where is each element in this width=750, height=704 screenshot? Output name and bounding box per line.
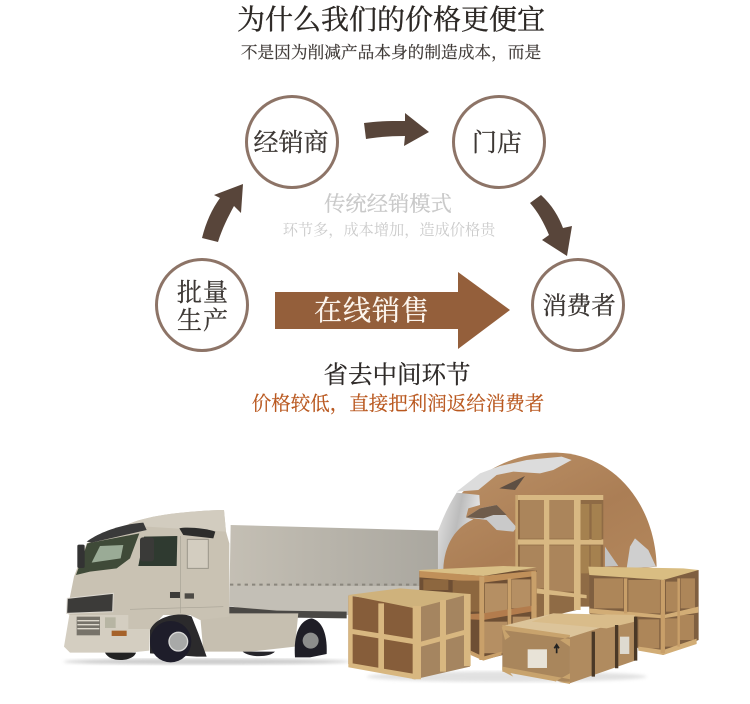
trailer	[229, 525, 438, 615]
crate: right	[588, 567, 699, 655]
windscreen	[76, 533, 139, 575]
wheel arch	[150, 614, 207, 657]
grille	[67, 593, 113, 613]
bumper	[64, 615, 150, 653]
rear wheel	[295, 618, 327, 657]
traditional model description: 环节多，成本增加，造成价格贵	[283, 221, 496, 239]
front wheel	[150, 621, 191, 662]
chassis	[200, 613, 298, 652]
circle: 批量生产	[156, 260, 248, 350]
subtitle: 不是因为削减产品本身的制造成本，而是	[241, 43, 541, 62]
circle: 经销商: 经销商	[253, 129, 329, 157]
mirror	[77, 545, 85, 568]
mediterranean	[466, 505, 517, 532]
circle: 批量生产: 批量	[177, 279, 229, 307]
shadow	[63, 659, 350, 665]
left silver crescent	[431, 493, 480, 570]
illustration: globe	[431, 453, 657, 572]
orange description: 价格较低，直接把利润返给消费者	[252, 393, 544, 415]
crate: front low	[502, 613, 637, 684]
traditional model heading: 传统经销模式	[324, 192, 452, 216]
heading: 省去中间环节: 省去中间环节	[324, 361, 470, 389]
india silver	[627, 538, 656, 568]
crate: middle	[419, 566, 537, 661]
title: 为什么我们的价格更便宜	[237, 4, 545, 36]
circle: 消费者: 消费者	[542, 292, 616, 320]
circle: 门店: 门店	[472, 129, 522, 157]
circle: 消费者	[532, 260, 624, 350]
illustration: truck	[63, 510, 438, 665]
side window	[138, 536, 177, 566]
arrow: 在线销售	[275, 272, 510, 349]
crate shadow	[367, 671, 647, 682]
circle: 经销商	[246, 96, 338, 188]
arrow: 经销商 to 门店	[364, 113, 429, 146]
crate: tall back	[516, 495, 603, 620]
sun visor	[87, 523, 147, 543]
circle: 门店	[454, 96, 544, 188]
front lower tyre	[105, 653, 136, 660]
arrow: 批量生产 to 经销商	[202, 184, 243, 242]
arrow: 门店 to 消费者	[530, 195, 572, 256]
circle: 批量生产: 生产	[177, 307, 229, 335]
illustration: crates	[348, 495, 699, 684]
door panel	[187, 539, 208, 568]
top silver band	[457, 457, 572, 492]
cab	[67, 510, 229, 629]
arrow: 在线销售: 在线销售	[314, 295, 430, 327]
crate: front left	[348, 588, 471, 679]
